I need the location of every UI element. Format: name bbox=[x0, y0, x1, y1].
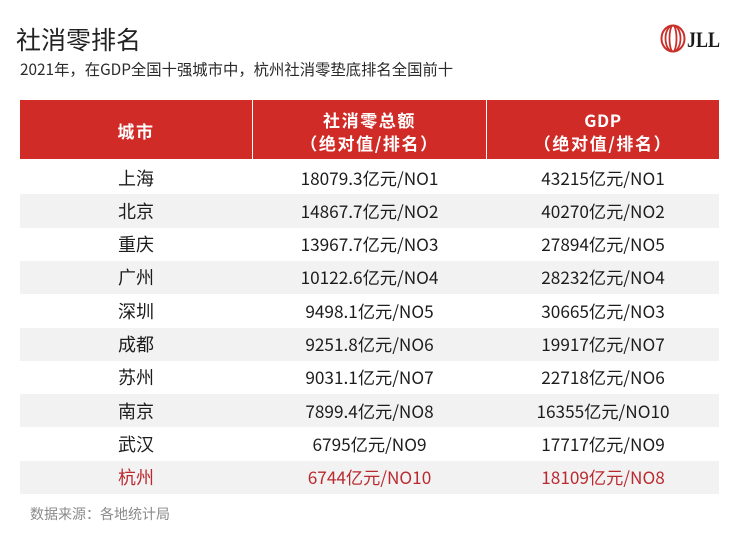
row: Guangzhou: 10122.6亿元/NO4 bbox=[301, 264, 438, 289]
row: Suzhou: 苏州 bbox=[118, 364, 154, 390]
row: Shenzhen: 30665亿元/NO3 bbox=[541, 298, 665, 323]
row: Chengdu: 9251.8亿元/NO6 bbox=[305, 331, 434, 356]
row: Wuhan: 武汉 bbox=[118, 431, 154, 457]
row: Beijing: 40270亿元/NO2 bbox=[541, 198, 665, 223]
table header: GDP: GDP bbox=[584, 106, 622, 132]
row: Suzhou: 22718亿元/NO6 bbox=[541, 364, 665, 389]
title: 社消零排名 bbox=[16, 21, 141, 57]
row: Shanghai: 上海 bbox=[118, 164, 154, 190]
row: Shenzhen: 深圳 bbox=[118, 298, 154, 324]
row: Chongqing: 13967.7亿元/NO3 bbox=[301, 231, 438, 256]
row: Beijing: 14867.7亿元/NO2 bbox=[301, 198, 438, 223]
icon: JLL logo bbox=[660, 24, 720, 52]
row: Guangzhou: 28232亿元/NO4 bbox=[541, 264, 665, 289]
row: Suzhou bbox=[118, 364, 665, 390]
row: Shenzhen: 9498.1亿元/NO5 bbox=[305, 298, 434, 323]
row: Hangzhou (highlighted): 6744亿元/NO10 bbox=[308, 464, 431, 489]
row: Guangzhou bbox=[20, 261, 719, 294]
row: Guangzhou: 广州 bbox=[118, 264, 154, 290]
row: Hangzhou (highlighted): 杭州 bbox=[118, 464, 154, 490]
row: Wuhan: 6795亿元/NO9 bbox=[312, 431, 426, 456]
row: Nanjing bbox=[20, 394, 719, 427]
table header: retail sales bbox=[253, 100, 486, 159]
table header: city bbox=[20, 100, 252, 159]
row: Wuhan: 17717亿元/NO9 bbox=[541, 431, 665, 456]
row: Chengdu: 成都 bbox=[118, 331, 154, 357]
row: Chongqing: 重庆 bbox=[118, 231, 154, 257]
row: Chengdu: 19917亿元/NO7 bbox=[541, 331, 665, 356]
row: Chongqing bbox=[118, 231, 665, 257]
row: Suzhou: 9031.1亿元/NO7 bbox=[305, 364, 434, 389]
row: Chongqing: 27894亿元/NO5 bbox=[541, 231, 665, 256]
table header: retail sales: 社消零总额 bbox=[323, 106, 416, 132]
row: Wuhan bbox=[118, 431, 665, 457]
source note: 数据来源：各地统计局 bbox=[30, 504, 170, 524]
row: Shanghai: 43215亿元/NO1 bbox=[541, 164, 665, 190]
row: Shanghai bbox=[118, 164, 665, 190]
table header: city: 城市 bbox=[117, 118, 155, 143]
row: Chengdu bbox=[20, 328, 719, 361]
row: Beijing: 北京 bbox=[118, 198, 154, 224]
table header: GDP: （绝对值/排名） bbox=[534, 130, 672, 154]
row: Hangzhou (highlighted): 18109亿元/NO8 bbox=[541, 464, 665, 489]
table header: retail sales: （绝对值/排名） bbox=[300, 130, 439, 154]
row: Nanjing: 7899.4亿元/NO8 bbox=[305, 398, 434, 423]
row: Shenzhen bbox=[118, 298, 665, 324]
row: Beijing bbox=[20, 194, 719, 228]
row: Hangzhou (highlighted) bbox=[20, 461, 719, 494]
subtitle: 2021年，在GDP全国十强城市中，杭州社消零垫底排名全国前十 bbox=[20, 58, 453, 80]
table header: GDP bbox=[487, 100, 719, 159]
row: Nanjing: 南京 bbox=[118, 398, 154, 424]
row: Nanjing: 16355亿元/NO10 bbox=[536, 398, 670, 423]
row: Shanghai: 18079.3亿元/NO1 bbox=[301, 164, 438, 190]
